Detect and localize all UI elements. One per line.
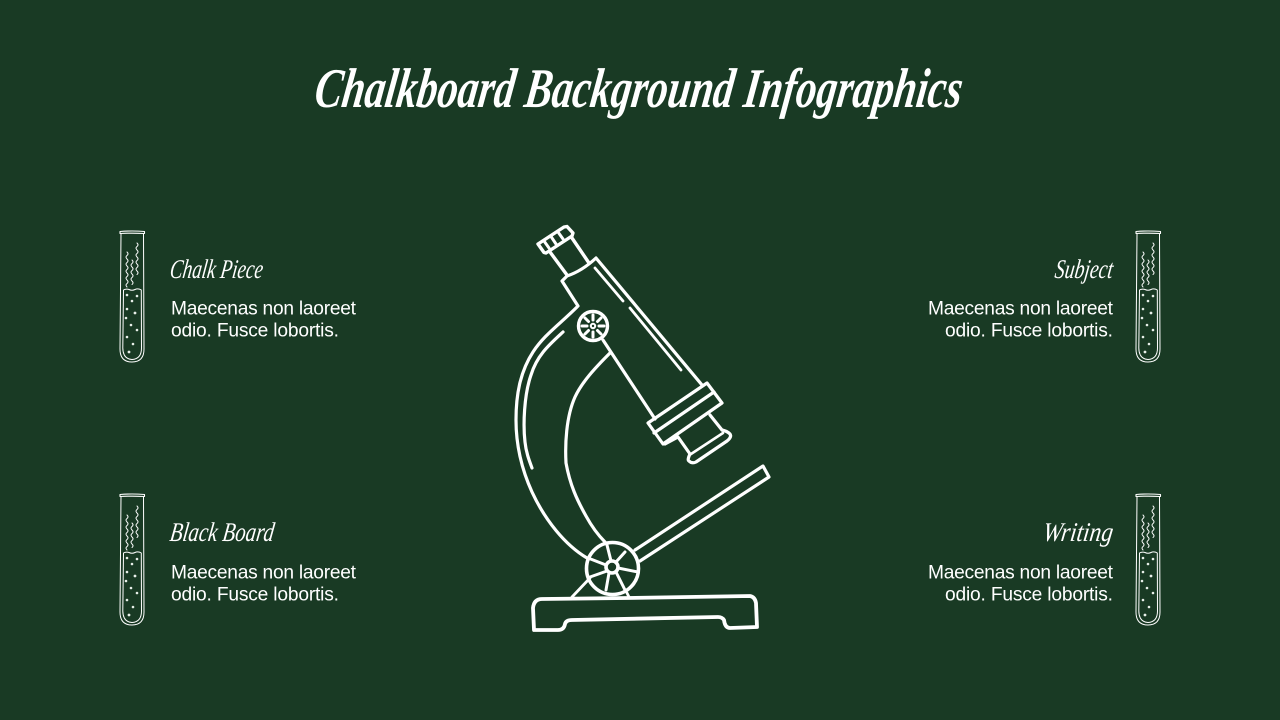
microscope illustration — [516, 226, 769, 630]
eyepiece — [538, 226, 589, 275]
text block: odio. Fusce lobortis. — [171, 584, 339, 606]
text block: Maecenas non laoreet — [928, 298, 1114, 320]
text block: odio. Fusce lobortis. — [171, 320, 339, 342]
icon: test tube — [120, 494, 144, 625]
base — [533, 578, 757, 630]
heading: Subject: Subject — [1053, 254, 1116, 284]
icon: test tube — [1136, 231, 1160, 362]
item: Chalk Piece — [120, 231, 357, 362]
item: Black Board — [120, 494, 357, 625]
text block: Maecenas non laoreet — [171, 298, 357, 320]
heading: Black Board: Black Board — [168, 517, 277, 547]
title: Chalkboard Background Infographics — [311, 58, 967, 120]
item: Writing — [928, 494, 1160, 625]
text block: odio. Fusce lobortis. — [945, 320, 1113, 342]
text block: Maecenas non laoreet — [928, 562, 1114, 584]
objective collar and lens — [648, 383, 731, 463]
heading: Chalk Piece: Chalk Piece — [168, 254, 265, 284]
body tube — [562, 258, 702, 419]
text block: Maecenas non laoreet — [171, 562, 357, 584]
focus knob — [578, 312, 608, 340]
heading: Writing: Writing — [1041, 517, 1115, 547]
item: Subject — [928, 231, 1160, 362]
icon: test tube — [120, 231, 144, 362]
curved arm — [516, 307, 610, 558]
icon: test tube — [1136, 494, 1160, 625]
lower wheel — [586, 542, 638, 594]
text block: odio. Fusce lobortis. — [945, 584, 1113, 606]
stage arm — [635, 466, 769, 561]
